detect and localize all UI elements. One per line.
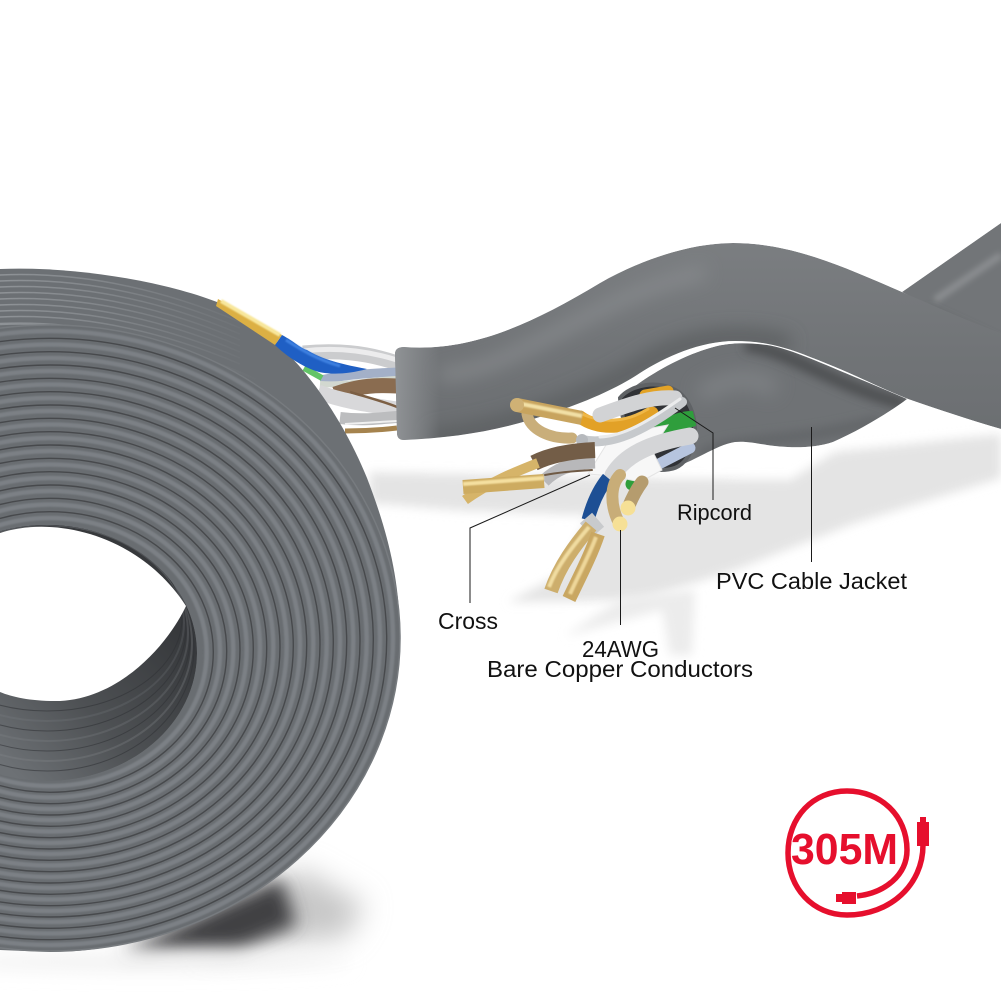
callout: 24AWG Bare Copper Conductors: 24AWG bbox=[582, 636, 659, 662]
coil back winding grooves bbox=[0, 274, 199, 348]
upper cable jacket bbox=[395, 243, 1001, 442]
blue pair bbox=[586, 478, 608, 532]
brown pair copper strands bbox=[463, 463, 544, 500]
callout: Ripcord: Ripcord bbox=[677, 500, 752, 525]
coil outer silhouette bbox=[0, 269, 400, 952]
left jacket cut end bbox=[395, 347, 432, 440]
callout: 24AWG Bare Copper Conductors: Bare Copper Conductors bbox=[487, 656, 753, 682]
cable opening bbox=[620, 385, 695, 470]
blue wire and copper on coil edge bbox=[216, 299, 367, 374]
callout: Cross bbox=[438, 475, 590, 634]
green pair conductor with end cap bbox=[620, 482, 642, 516]
bare copper conductor with end cap bbox=[612, 475, 628, 532]
coil of cable bbox=[0, 269, 400, 952]
callout: PVC Cable Jacket: PVC Cable Jacket bbox=[716, 568, 907, 594]
exposed twisted pairs bbox=[463, 391, 695, 599]
gold loop conductor bbox=[527, 414, 572, 438]
gold conductor of orange pair bbox=[510, 398, 582, 418]
badge: 305M length icon bbox=[788, 791, 929, 915]
coil centre hole bbox=[0, 527, 186, 701]
blue pair copper strands bbox=[549, 526, 598, 599]
icon: top plug bbox=[917, 817, 929, 846]
icon: coiled red cable bbox=[788, 791, 923, 915]
wire bundle: left exposed pairs bbox=[303, 349, 397, 431]
cable strand behind bbox=[902, 223, 1001, 333]
cross separator tape bbox=[588, 425, 668, 482]
ripcord bbox=[576, 399, 682, 446]
white wire bbox=[600, 398, 675, 415]
lower cable jacket bbox=[636, 343, 907, 464]
callout: Cross: Cross bbox=[438, 608, 498, 634]
orange pair bbox=[580, 391, 668, 426]
callout: 24AWG Bare Copper Conductors bbox=[487, 530, 753, 682]
green pair bbox=[632, 412, 695, 484]
callout: Ripcord bbox=[675, 408, 752, 525]
badge length text: 305M bbox=[791, 825, 898, 874]
cast shadows on ground bbox=[0, 434, 1001, 970]
coil front face windings bbox=[0, 325, 400, 951]
icon: bottom plug bbox=[836, 892, 856, 904]
white green-pair wire bbox=[613, 436, 690, 475]
brown pair bbox=[534, 450, 595, 481]
coil inner wall bbox=[0, 525, 197, 781]
